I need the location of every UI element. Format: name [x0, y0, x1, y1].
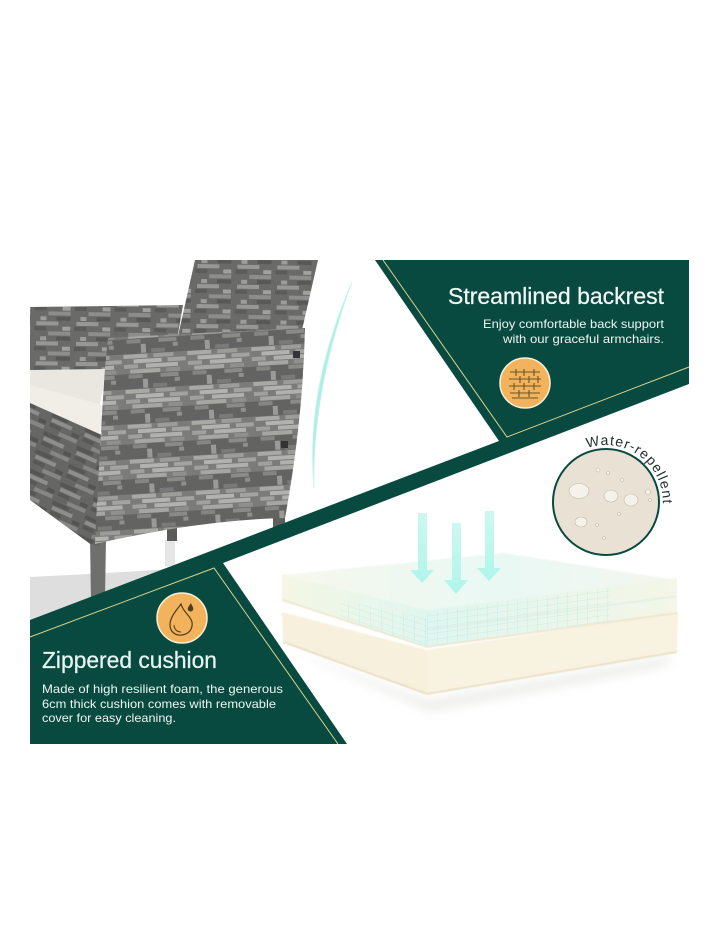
text: cushion description: 6cm thick cushion comes with removable: [42, 697, 276, 711]
text: cushion description: cover for easy cleaning.: [42, 711, 176, 725]
cushion shadow: [290, 650, 677, 712]
icon: water drop: [157, 593, 207, 643]
chair back legs: [165, 514, 285, 566]
text: cushion description: Made of high resilient foam, the generous: [42, 682, 283, 696]
text: backrest description: with our graceful armchairs.: [502, 332, 664, 346]
heading: zippered cushion: Zippered cushion: [42, 647, 217, 673]
photo: rattan armchair: [30, 260, 318, 622]
water droplets: [569, 468, 652, 540]
decorative swoosh: [313, 282, 352, 488]
arrows: pressing down on cushion: [410, 511, 501, 594]
lower cushion: [282, 612, 678, 694]
panel: green diagonal shape: [30, 260, 689, 744]
photo: foam and cover cushions: [282, 553, 678, 712]
front arm panel: [95, 328, 305, 544]
chair bolts: [281, 351, 300, 448]
gold outline: [383, 260, 689, 437]
backrest: [178, 260, 318, 336]
fabric circle: [553, 449, 659, 555]
text: cushion description: [42, 682, 283, 725]
icon: woven texture: [500, 358, 550, 408]
curved label: water-repellent: Water-repellent: [585, 436, 672, 504]
text: backrest description: Enjoy comfortable back support: [483, 317, 665, 331]
heading: streamlined backrest: Streamlined backrest: [448, 283, 665, 309]
panel: water-repellent swatch: [552, 436, 672, 556]
panel: zippered cushion: [30, 568, 338, 744]
front leg: [90, 538, 106, 603]
floor rug: [30, 569, 200, 622]
foam grid lines: [340, 588, 610, 645]
chair side panel: [30, 403, 104, 546]
upper foam cushion: [282, 553, 677, 647]
panel: streamlined backrest: [383, 260, 689, 437]
gold outline: [30, 568, 338, 744]
seat cushion: [30, 369, 106, 435]
text: backrest description: [483, 317, 665, 346]
inner arm panel: [30, 305, 183, 372]
